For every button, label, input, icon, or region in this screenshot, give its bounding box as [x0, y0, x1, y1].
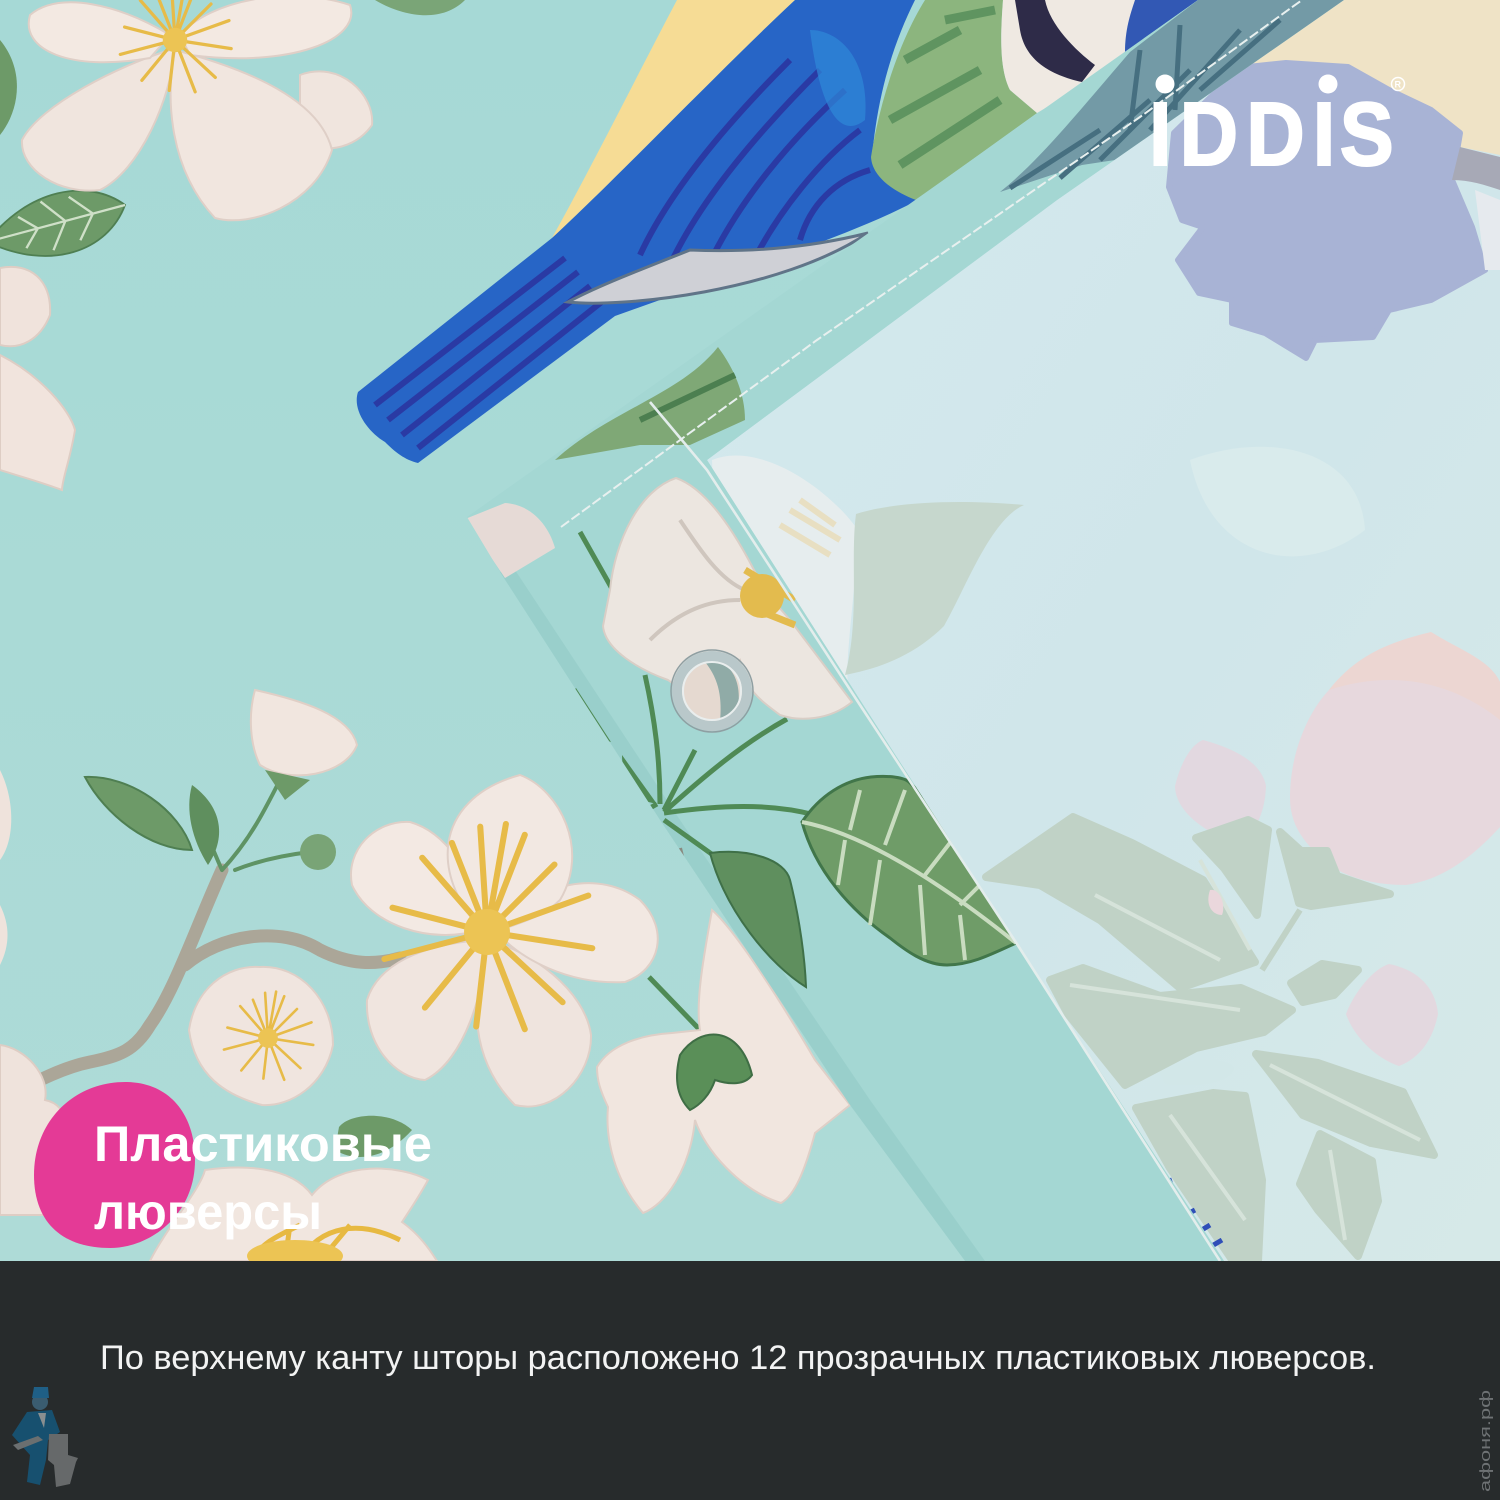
heading: Пластиковые люверсы: Пластиковые	[94, 1116, 432, 1172]
logo: IDDIS: D	[1180, 84, 1238, 185]
fold stems	[578, 530, 808, 856]
sheer curtain panel	[700, 0, 1500, 1261]
flower left edge	[0, 770, 60, 1216]
lower flower under fold	[597, 910, 850, 1213]
fold flower	[603, 478, 852, 719]
blue tit bird	[357, 0, 1198, 463]
pink accent blob	[34, 1082, 195, 1248]
heading: Пластиковые люверсы: люверсы	[94, 1184, 322, 1240]
ghost leaves cluster	[986, 817, 1434, 1261]
green leaf top left	[0, 0, 465, 273]
heading: Пластиковые люверсы	[94, 1116, 432, 1240]
branch with twigs	[40, 785, 406, 1084]
logo: IDDIS: I	[1313, 84, 1335, 185]
ghost gaps between leaves	[1160, 1060, 1234, 1085]
ghost flower and leaf	[712, 447, 1362, 680]
ghost bird head strip	[1452, 147, 1500, 190]
ghost blue ticks	[1170, 1178, 1224, 1247]
logo: IDDIS: I	[1149, 84, 1172, 185]
logo: IDDIS: S	[1340, 84, 1394, 185]
panel: caption bar	[0, 1261, 1500, 1500]
hem stitching along top	[561, 0, 1302, 527]
ghost pink buds	[1175, 632, 1500, 1066]
blue feather on hem	[1000, 0, 1344, 192]
fold edge shadow	[500, 570, 985, 1261]
corner pink flower	[465, 503, 555, 578]
logo: IDDIS: R	[1394, 80, 1402, 90]
icon: plumber with toilet	[12, 1387, 78, 1487]
flower small lower left	[189, 967, 333, 1105]
green leaf on hem	[555, 347, 745, 460]
hem stitching along fold	[650, 402, 1220, 1261]
caption text: По верхнему канту шторы расположено 12 прозрачных пластиковых люверсов.	[100, 1339, 1376, 1377]
ghost beige bird body	[1254, 0, 1500, 155]
icon: plastic eyelet	[671, 650, 753, 732]
small leaves and bud	[85, 690, 357, 870]
pink buds left	[0, 267, 75, 490]
flower bottom	[150, 1116, 437, 1272]
watermark: афоня.рф: афоня.рф	[1477, 1390, 1494, 1492]
logo: IDDIS: D	[1246, 84, 1305, 185]
flower large centre	[351, 775, 658, 1107]
ghost blue wing	[1169, 63, 1485, 358]
large fold leaf	[802, 776, 1016, 965]
logo: IDDIS	[1154, 74, 1406, 167]
curtain hem band and side fold	[468, 0, 1344, 1261]
fold bud	[492, 626, 568, 706]
flower top left	[22, 0, 372, 220]
small fold leaf	[710, 852, 806, 987]
